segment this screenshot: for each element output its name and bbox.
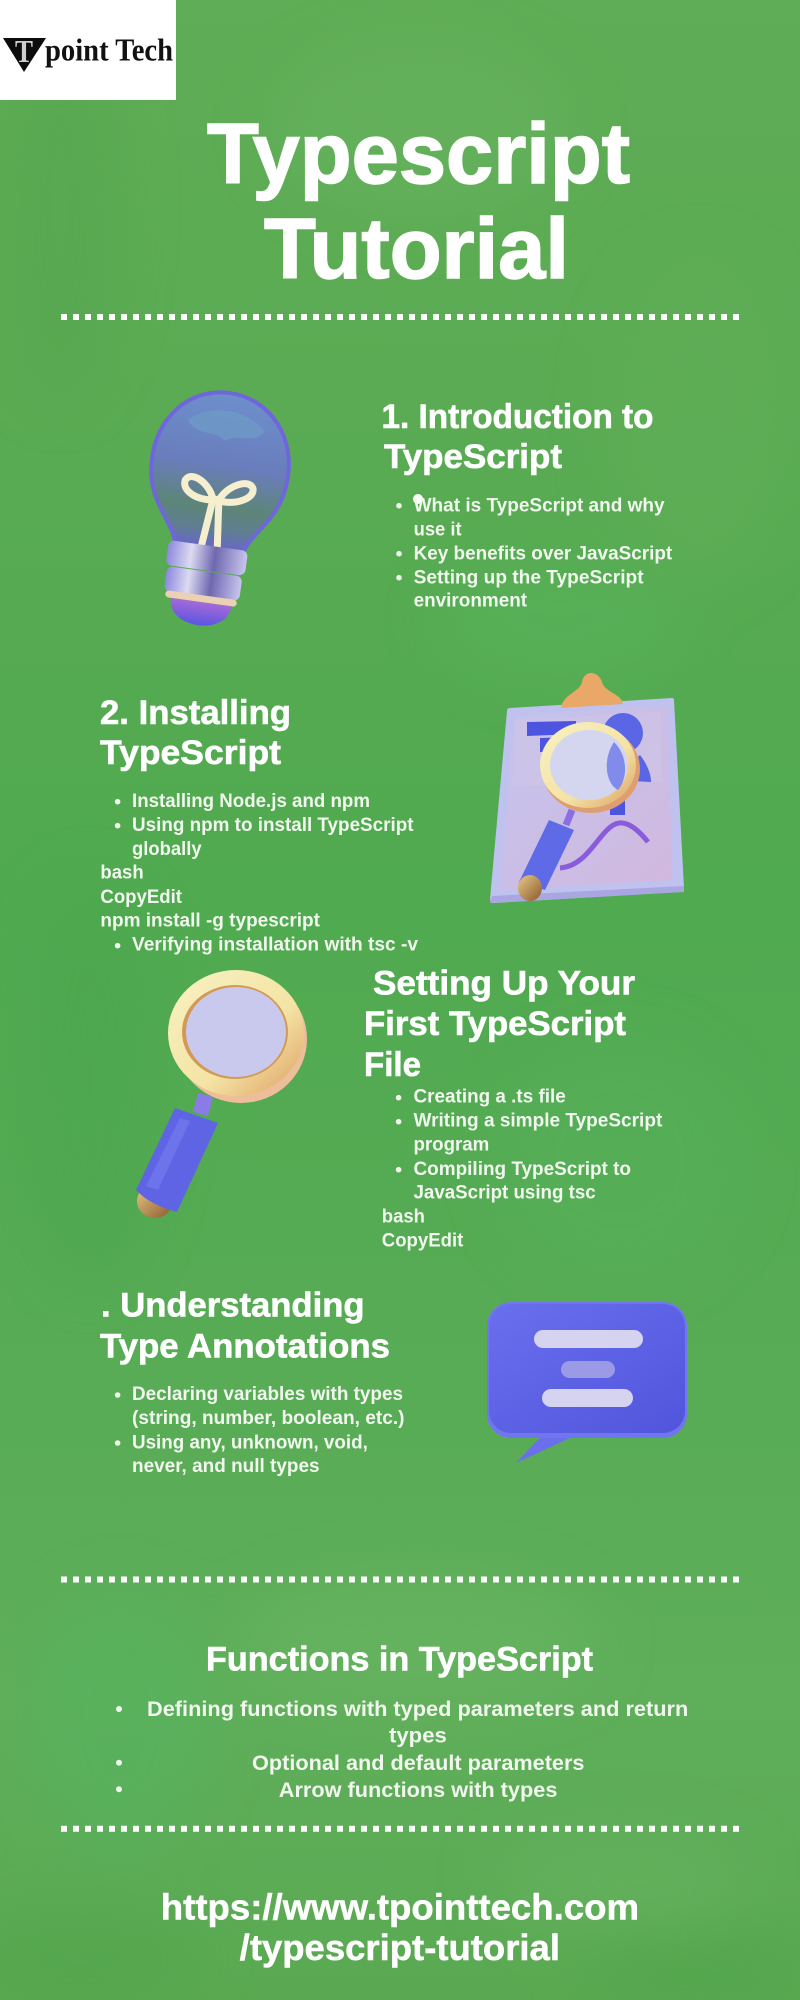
title: Tutorial (264, 202, 569, 297)
panel: introduction (130, 384, 673, 635)
heading (382, 398, 654, 476)
bullet list: Declaring variables with types (132, 1384, 403, 1405)
bullet list and code: program (414, 1135, 489, 1156)
bullet list and code: Writing a simple TypeScript (414, 1111, 663, 1132)
heading (100, 1287, 390, 1366)
logo: Tpoint Tech (0, 0, 176, 100)
heading: TypeScript (100, 734, 281, 772)
bullet list and code: JavaScript using tsc (414, 1183, 596, 1204)
bullet list: Key benefits over JavaScript (414, 543, 673, 564)
bullet list and code: Using npm to install TypeScript (132, 815, 414, 836)
title: Typescript (207, 107, 630, 202)
bullet list: use it (414, 519, 462, 540)
bullet list: never, and null types (132, 1456, 320, 1477)
bullet list and code (100, 791, 418, 956)
bullet list: (string, number, boolean, etc.) (132, 1408, 404, 1429)
heading (364, 964, 635, 1084)
bullet list: Arrow functions with types (279, 1779, 557, 1802)
bullet list and code: npm install -g typescript (100, 911, 321, 932)
bullet list and code (382, 1087, 663, 1252)
heading: File (364, 1046, 421, 1084)
heading: 2. Installing (100, 694, 291, 732)
heading: 1. Introduction to (382, 398, 654, 436)
heading: Type Annotations (100, 1328, 390, 1366)
panel: type annotations (100, 1287, 687, 1477)
icon: clipboard with magnifier (490, 673, 684, 903)
icon: speech bubble (487, 1302, 687, 1463)
bullet list and code: Verifying installation with tsc -v (132, 935, 418, 956)
icon: light bulb (130, 384, 298, 635)
heading: . Understanding (101, 1287, 364, 1325)
bullet list and code: Compiling TypeScript to (414, 1159, 631, 1180)
heading: TypeScript (384, 438, 562, 476)
heading: First TypeScript (364, 1005, 626, 1043)
url footer: https://www.tpointtech.com (161, 1886, 639, 1927)
bullet list and code: bash (382, 1207, 425, 1228)
bullet list and code: bash (100, 863, 144, 884)
bullet list: What is TypeScript and why (414, 495, 665, 516)
logo: Tpoint Tech: T (15, 33, 33, 69)
bullet list: Defining functions with typed parameters and return (147, 1698, 688, 1721)
title (207, 107, 630, 297)
bullet list: environment (414, 591, 528, 612)
panel: first file (136, 964, 663, 1252)
bullet list: Setting up the TypeScript (414, 567, 644, 588)
heading: Functions in TypeScript (206, 1641, 593, 1679)
panel: functions (116, 1641, 688, 1802)
bullet list and code: CopyEdit (382, 1231, 464, 1252)
bullet list: types (389, 1725, 447, 1748)
heading: Setting Up Your (373, 964, 635, 1002)
bullet list and code: CopyEdit (100, 887, 183, 908)
bullet list: Optional and default parameters (252, 1752, 584, 1775)
icon: magnifying glass (136, 970, 307, 1218)
url footer: /typescript-tutorial (240, 1927, 560, 1968)
panel: installing (100, 673, 684, 956)
bullet list and code: Installing Node.js and npm (132, 791, 370, 812)
bullet list (116, 1698, 688, 1802)
bullet list (115, 1384, 405, 1477)
bullet list and code: Creating a .ts file (414, 1087, 566, 1108)
bullet list: Using any, unknown, void, (132, 1432, 368, 1453)
heading (100, 694, 291, 772)
bullet list and code: globally (132, 839, 202, 860)
logo: Tpoint Tech: point Tech (45, 32, 173, 68)
bullet list (396, 494, 673, 612)
url footer (161, 1886, 639, 1968)
